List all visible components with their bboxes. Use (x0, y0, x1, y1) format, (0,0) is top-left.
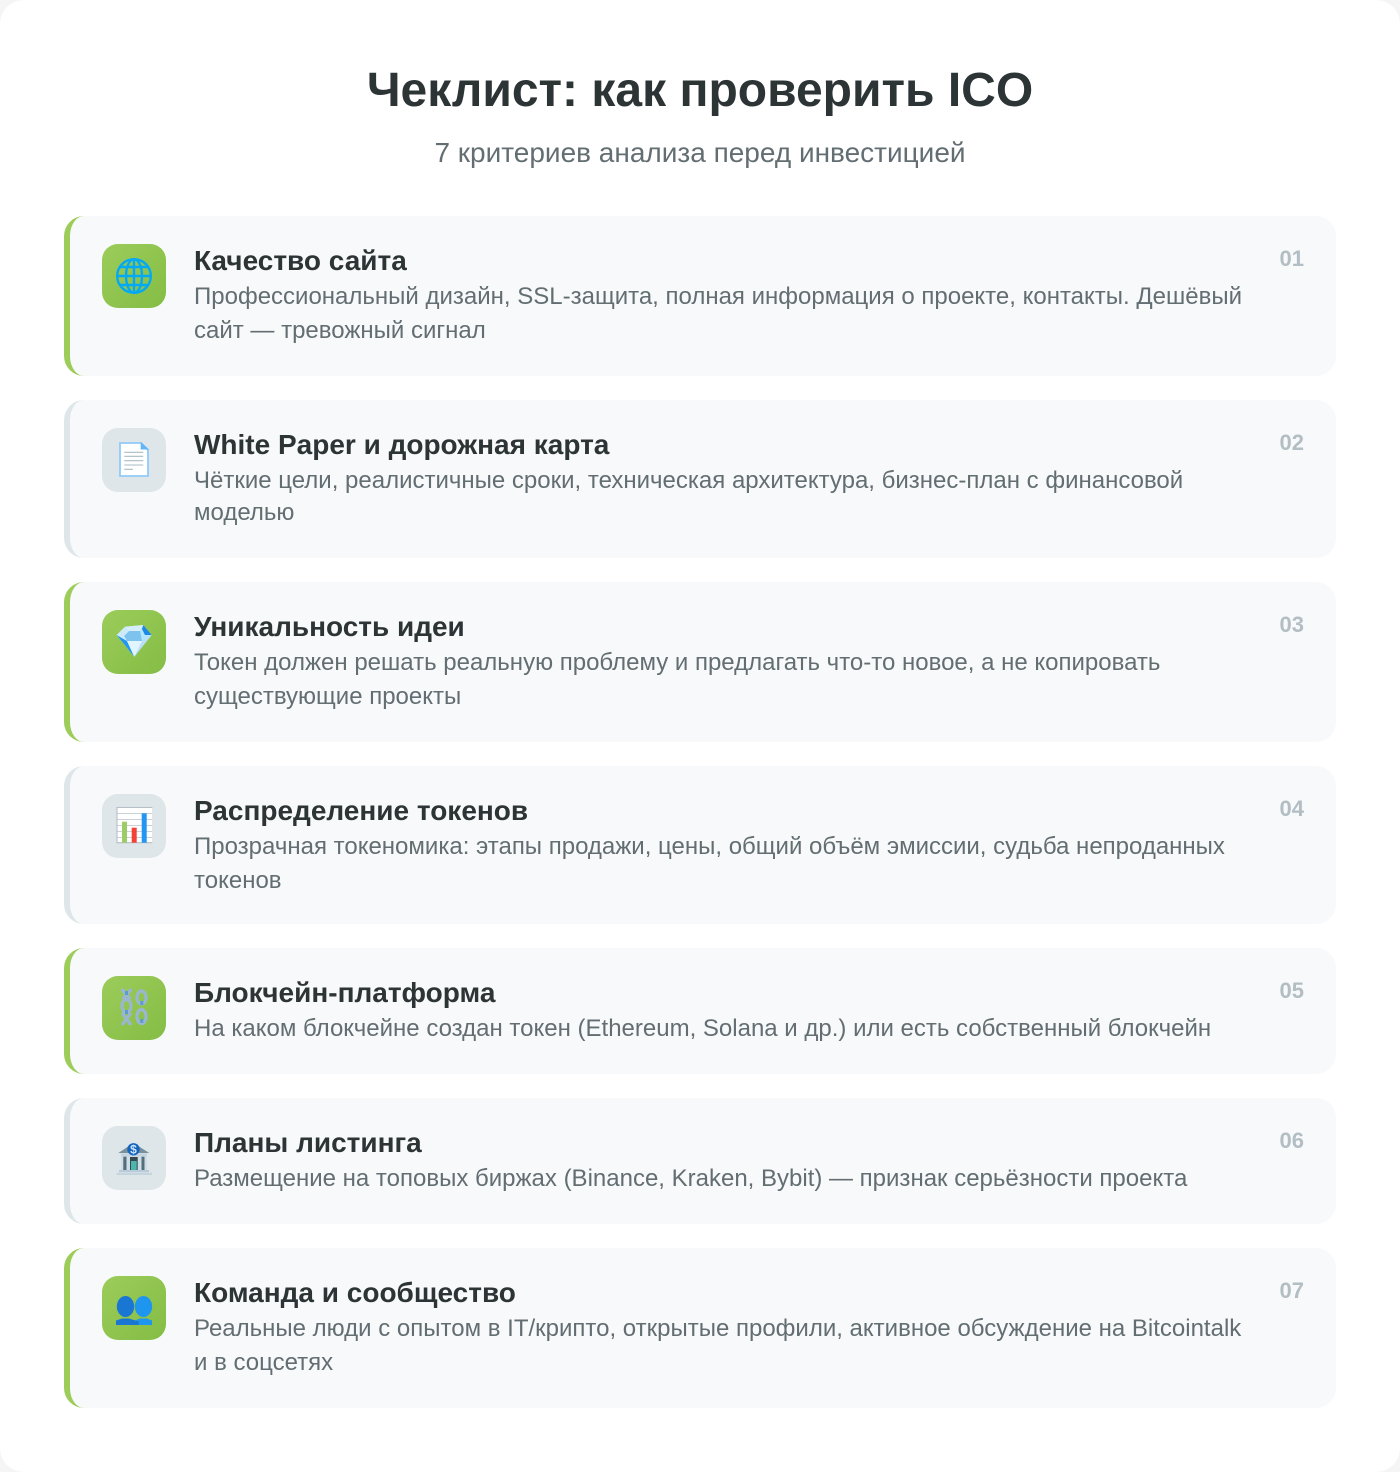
heading: Распределение токенов (194, 795, 528, 826)
number: 02 (1280, 430, 1304, 455)
panel: criterion 03 unique idea (64, 582, 1336, 742)
subtitle: 7 критериев анализа перед инвестицией (434, 137, 966, 168)
panel: criterion 05 blockchain platform (64, 948, 1336, 1074)
number: 03 (1280, 612, 1304, 637)
description: и в соцсетях (194, 1349, 333, 1376)
icon: bank (102, 1126, 166, 1190)
number: 04 (1280, 796, 1304, 821)
panel: criterion 04 token distribution (64, 766, 1336, 924)
icon: document (102, 428, 166, 492)
description: Токен должен решать реальную проблему и предлагать что-то новое, а не копировать (194, 649, 1160, 676)
description: токенов (194, 867, 282, 894)
panel: criterion 01 website quality (64, 216, 1336, 376)
heading: Уникальность идеи (194, 611, 465, 642)
heading: Планы листинга (194, 1127, 422, 1158)
icon: globe (102, 244, 166, 308)
heading: White Paper и дорожная карта (194, 429, 609, 460)
description: Профессиональный дизайн, SSL-защита, полная информация о проекте, контакты. Дешёвый (194, 283, 1242, 310)
panel: criterion 07 team and community (64, 1248, 1336, 1408)
description: На каком блокчейне создан токен (Ethereum, Solana и др.) или есть собственный блокчейн (194, 1015, 1211, 1042)
number: 06 (1280, 1128, 1304, 1153)
description: существующие проекты (194, 683, 461, 710)
description: Чёткие цели, реалистичные сроки, техническая архитектура, бизнес-план с финансовой (194, 467, 1183, 494)
panel: criterion 06 listing plans (64, 1098, 1336, 1224)
description: сайт — тревожный сигнал (194, 317, 486, 344)
description (194, 649, 1160, 710)
icon: chain links (102, 976, 166, 1040)
title: Чеклист: как проверить ICO (367, 64, 1033, 117)
icon: bar chart (102, 794, 166, 858)
heading: Качество сайта (194, 245, 407, 276)
description (194, 467, 1183, 526)
number: 05 (1280, 978, 1304, 1003)
description (194, 283, 1242, 344)
heading: Команда и сообщество (194, 1277, 516, 1308)
icon: diamond (102, 610, 166, 674)
description (194, 833, 1225, 894)
description: Прозрачная токеномика: этапы продажи, цены, общий объём эмиссии, судьба непроданных (194, 833, 1225, 860)
panel: criterion 02 white paper (64, 400, 1336, 558)
description: Реальные люди с опытом в IT/крипто, открытые профили, активное обсуждение на Bitcointalk (194, 1315, 1241, 1342)
heading: Блокчейн-платформа (194, 977, 495, 1008)
icon: bank: $ (130, 1143, 137, 1157)
icon: people (102, 1276, 166, 1340)
number: 07 (1280, 1278, 1304, 1303)
description (194, 1315, 1242, 1376)
description: моделью (194, 499, 294, 526)
number: 01 (1280, 246, 1304, 271)
description: Размещение на топовых биржах (Binance, Kraken, Bybit) — признак серьёзности проекта (194, 1165, 1187, 1192)
